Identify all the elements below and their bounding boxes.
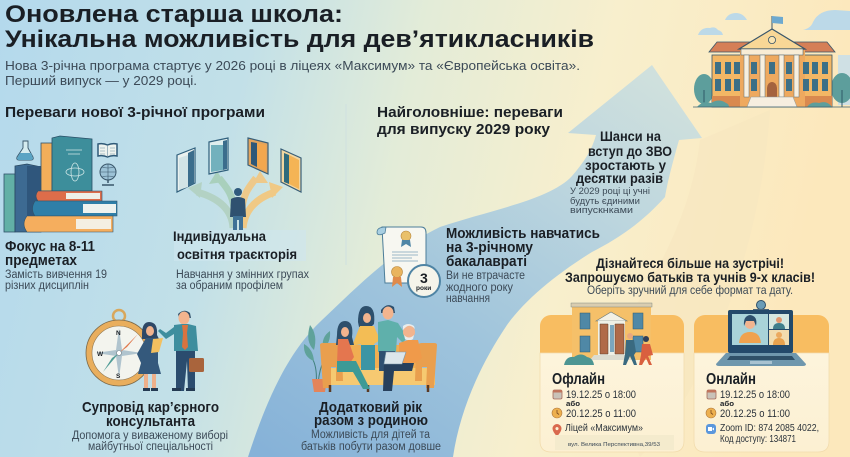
panel: offline: 20.12.25 о 11:00 [566, 408, 636, 420]
text: admission chances: випускнками [570, 205, 633, 216]
faded sweep behind arrow [600, 110, 770, 457]
text: extra year: Додатковий рік [319, 399, 422, 416]
subtitle: Перший випуск — у 2029 році. [5, 73, 197, 88]
icon: diploma [377, 227, 440, 297]
panel: offline: Офлайн [552, 371, 605, 388]
text: invitation [565, 255, 815, 297]
sofa [320, 343, 437, 392]
icon: family on sofa [304, 305, 437, 392]
text: bachelor: Ви не втрачасте [446, 270, 525, 282]
teal thin book [4, 174, 15, 232]
icon: laptop video call [716, 300, 806, 366]
panel: online: Zoom ID: 874 2085 4022, [720, 423, 819, 434]
text: bachelor: на 3-річному [446, 240, 533, 256]
text: focus: різних дисциплін [5, 280, 89, 292]
teal tall book [52, 136, 92, 191]
icon: compass: N [116, 330, 121, 337]
text: extra year: Можливість для дітей та [311, 429, 431, 441]
text: consultant: консультанта [106, 413, 196, 430]
text: admission chances: вступ до ЗВО [588, 143, 672, 159]
text: consultant: Допомога у виваженому виборі [72, 430, 228, 442]
title [5, 1, 594, 53]
badge: 3 years: 3 [420, 270, 428, 286]
heading: most important: Найголовніше: переваги [377, 104, 563, 121]
panel: online: Код доступу: 134871 [720, 434, 796, 445]
plant [304, 325, 330, 392]
icon: calendar [553, 390, 562, 399]
text: admission chances: будуть єдиними [570, 196, 640, 207]
text: trajectory: Навчання у змінних групах [176, 269, 309, 281]
icon: zoom [706, 424, 716, 434]
text: focus: Замість вивчення 19 [5, 269, 107, 281]
panel: offline: 19.12.25 о 18:00 [566, 389, 636, 401]
standing man [378, 305, 407, 371]
orange book [24, 216, 113, 232]
text: trajectory: освітня траєкторія [177, 247, 297, 262]
icon: calendar [707, 390, 716, 399]
badge: 3 years: роки [416, 285, 431, 292]
text: bachelor: бакалавраті [446, 254, 527, 270]
panel: offline [540, 303, 684, 452]
heading: program advantages: Переваги нової 3-річної програми [5, 104, 265, 121]
icon: globe [100, 164, 116, 185]
text: focus: Фокус на 8-11 [5, 239, 95, 255]
panel: offline: або [566, 399, 580, 408]
text: bachelor: жодного року [446, 282, 513, 294]
icon: compass: E [138, 351, 143, 358]
text: bachelor [446, 226, 600, 305]
panel: online: 20.12.25 о 11:00 [720, 408, 790, 420]
panel: offline: вул. Велика Перспективна,39/53 [568, 442, 660, 448]
icon: pin [552, 424, 562, 436]
text: consultant [72, 399, 228, 453]
navy book [15, 164, 41, 232]
text: bachelor: навчання [446, 293, 490, 305]
divider [345, 104, 347, 265]
text: consultant: Супровід кар’єрного [82, 399, 219, 416]
icon: doors and paths [177, 138, 301, 230]
heading: most important: для випуску 2029 року [377, 121, 551, 138]
title: Оновлена старша школа: [5, 1, 343, 28]
icon: visitors [623, 333, 653, 365]
icon: flask [17, 141, 33, 160]
text: admission chances: Шанси на [600, 128, 661, 144]
red book [36, 191, 102, 201]
text: extra year: батьків побути разом довше [301, 441, 441, 453]
title: Унікальна можливість для дев’ятикласників [5, 26, 594, 53]
text: invitation: Запрошуємо батьків та учнів 9-х класів! [565, 269, 815, 285]
text: focus [5, 239, 107, 292]
panel: online: 19.12.25 о 18:00 [720, 389, 790, 401]
icon: compass: W [97, 351, 104, 358]
grandfather [383, 324, 422, 391]
door 4 [281, 149, 301, 192]
address box [555, 435, 674, 450]
door 3 [248, 138, 268, 174]
text: focus: предметах [5, 253, 77, 269]
growth arrow [248, 65, 702, 457]
panel: offline: Ліцей «Максимум» [565, 423, 643, 434]
text: admission chances [570, 128, 672, 216]
text: trajectory: Індивідуальна [173, 229, 266, 244]
man [158, 311, 204, 391]
text: invitation: Дізнайтеся більше на зустрічі! [596, 255, 784, 271]
door 1 [177, 148, 195, 192]
text: invitation: Оберіть зручний для себе формат та дату. [587, 283, 793, 297]
woman [137, 322, 163, 391]
icon: lyceum building [564, 303, 653, 365]
icon: books [4, 136, 117, 232]
icon: consultant and student [137, 311, 204, 391]
subtitle [5, 58, 580, 88]
text: bachelor: Можливість навчатись [446, 226, 600, 242]
icon: school building [693, 10, 850, 107]
icon: clock [552, 408, 562, 418]
panel: online: Онлайн [706, 371, 756, 388]
door 2 [209, 138, 228, 174]
heading: most important [377, 104, 563, 138]
icon: compass [86, 310, 152, 386]
text: admission chances: зростають у [585, 157, 666, 173]
icon: clock [706, 408, 716, 418]
blue book [32, 201, 117, 216]
text band [174, 230, 306, 261]
person [230, 188, 246, 230]
text: trajectory: за обраним профілем [176, 280, 283, 292]
text: consultant: майбутньої спеціальності [88, 441, 213, 453]
panel: online [694, 300, 829, 452]
subtitle: Нова 3-річна програма стартує у 2026 році в ліцеях «Максимум» та «Європейська освіта». [5, 58, 580, 73]
text: admission chances: десятки разів [576, 170, 663, 186]
icon: compass: S [116, 373, 121, 380]
panel: online: або [720, 399, 734, 408]
badge: 3 years [408, 265, 440, 297]
text: extra year [301, 399, 441, 453]
text: admission chances: У 2029 році ці учні [570, 186, 650, 197]
path arrows [188, 171, 283, 228]
text: trajectory [173, 229, 309, 292]
standing woman [352, 306, 380, 370]
seated woman [336, 321, 370, 389]
text: extra year: разом з родиною [314, 412, 428, 429]
icon: open book [98, 144, 117, 157]
orange upright book [41, 143, 52, 191]
